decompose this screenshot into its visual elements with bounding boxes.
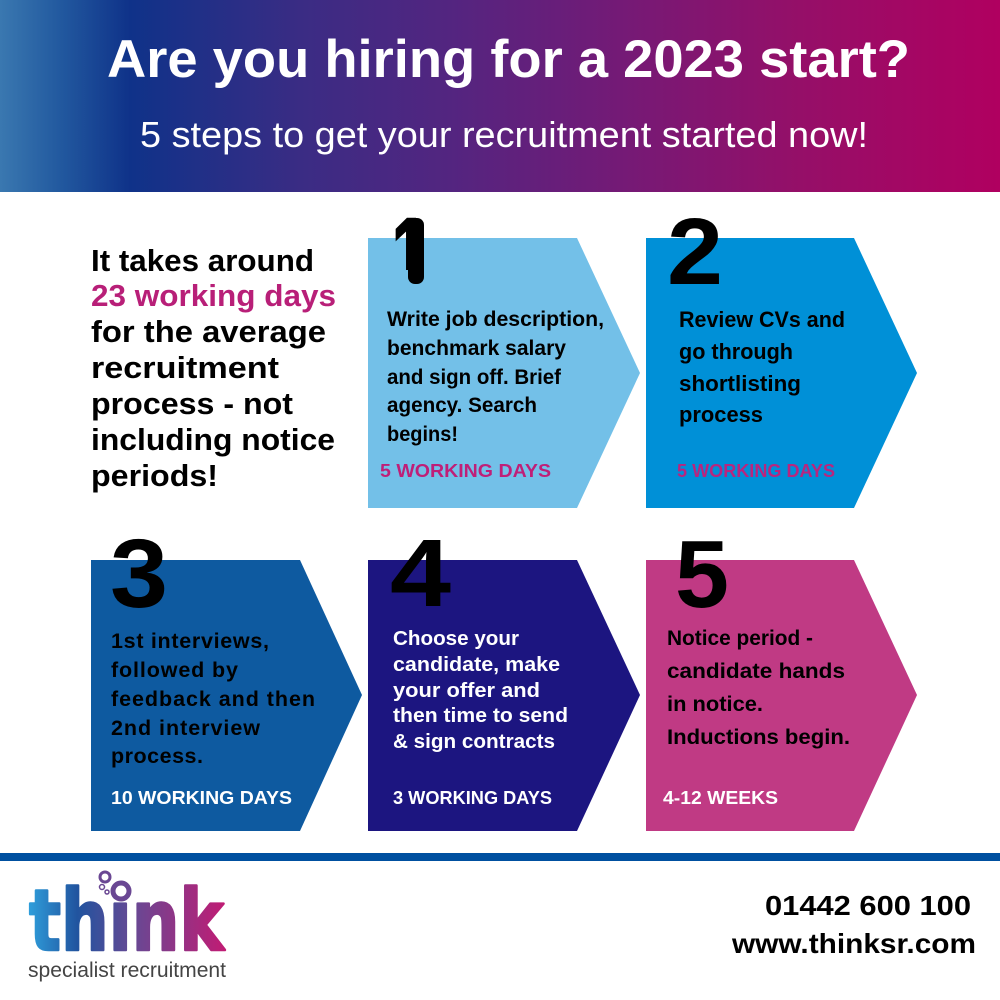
step 5 description xyxy=(667,626,850,749)
step 1 description: agency. Search xyxy=(387,394,537,417)
intro text block xyxy=(91,243,336,493)
step 1 description: begins! xyxy=(387,423,458,446)
logo: think specialist recruitment xyxy=(28,872,226,982)
step number 3: 3 xyxy=(110,519,168,628)
step 4 description: candidate, make xyxy=(393,654,560,676)
step 3 description xyxy=(111,629,315,768)
step 5 description: Notice period - xyxy=(667,626,813,650)
step 2 description xyxy=(679,307,845,427)
panel: step 4 xyxy=(368,520,640,831)
step 2 description: Review CVs and xyxy=(679,307,845,332)
intro text block: 23 working days xyxy=(91,278,336,313)
step 1 description: Write job description, xyxy=(387,308,604,331)
step 3 description: feedback and then xyxy=(111,687,315,711)
panel: step 3 xyxy=(91,519,362,831)
step number 2: 2 xyxy=(667,199,723,305)
step 2 description: shortlisting xyxy=(679,371,801,396)
subtitle: 5 steps to get your recruitment started now! xyxy=(140,114,868,155)
step 4 description: Choose your xyxy=(393,628,519,650)
step 1 description: and sign off. Brief xyxy=(387,366,562,389)
intro text block: It takes around xyxy=(91,243,314,278)
step 5 duration: 4-12 WEEKS xyxy=(663,788,778,808)
step 5 description: Inductions begin. xyxy=(667,725,850,749)
panel: step 5 xyxy=(646,521,917,831)
panel: step 1 xyxy=(368,199,640,508)
step 3 duration: 10 WORKING DAYS xyxy=(111,788,292,808)
step 1 description xyxy=(387,308,604,446)
logo tagline: specialist recruitment xyxy=(28,959,226,982)
step 5 description: candidate hands xyxy=(667,659,845,683)
step 1 description: benchmark salary xyxy=(387,337,566,360)
intro text block: including notice xyxy=(91,422,335,457)
intro text block: for the average xyxy=(91,314,326,349)
step 2 description: go through xyxy=(679,339,793,364)
step 5 description: in notice. xyxy=(667,692,763,716)
step 4 description xyxy=(393,628,568,753)
contact details: 01442 600 100 xyxy=(765,890,971,921)
step 4 description: & sign contracts xyxy=(393,731,555,753)
step 3 description: followed by xyxy=(111,658,238,682)
step number 4: 4 xyxy=(390,520,451,627)
step number 5: 5 xyxy=(675,521,729,628)
step 4 duration: 3 WORKING DAYS xyxy=(393,788,552,808)
step 3 description: process. xyxy=(111,744,203,768)
step 2 description: process xyxy=(679,402,763,427)
panel: step 2 xyxy=(646,199,917,508)
step 3 description: 1st interviews, xyxy=(111,629,269,653)
step number 1: 1 xyxy=(392,199,427,305)
header banner xyxy=(0,0,1000,192)
logo wordmark: think xyxy=(29,872,226,971)
step number 1 xyxy=(396,218,424,284)
intro text block: periods! xyxy=(91,458,218,493)
title: Are you hiring for a 2023 start? xyxy=(107,30,910,89)
icon: logo bubbles xyxy=(100,872,129,899)
intro text block: process - not xyxy=(91,386,293,421)
step 1 duration: 5 WORKING DAYS xyxy=(380,461,551,481)
step 3 description: 2nd interview xyxy=(111,716,260,740)
step 4 description: your offer and xyxy=(393,680,540,702)
intro text block: recruitment xyxy=(91,350,279,385)
step 4 description: then time to send xyxy=(393,705,568,727)
step 2 duration: 5 WORKING DAYS xyxy=(677,461,835,481)
contact details xyxy=(731,890,976,959)
contact details: www.thinksr.com xyxy=(731,928,976,959)
